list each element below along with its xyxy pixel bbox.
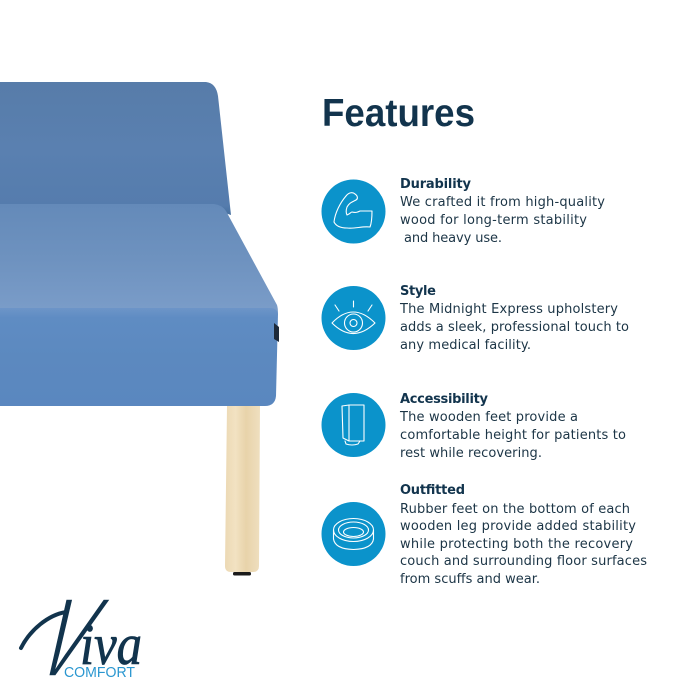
text: accessibility [399, 392, 626, 461]
text: accessibility: The wooden feet provide a [399, 410, 578, 425]
text: style: Style [400, 284, 436, 299]
text: style [399, 284, 629, 353]
icon: eye [322, 286, 386, 350]
text: style: any medical facility. [400, 338, 531, 353]
text: outfitted: Outfitted [400, 483, 465, 498]
feature: outfitted [322, 483, 647, 587]
text: outfitted: from scuffs and wear. [400, 572, 540, 587]
text: durability: We crafted it from high-quality [400, 195, 605, 210]
feature: durability [322, 177, 605, 246]
text: accessibility: rest while recovering. [400, 446, 542, 461]
title: Features [322, 92, 475, 135]
icon: flexed arm [322, 180, 386, 244]
wooden leg [225, 406, 260, 572]
couch seat front [0, 308, 278, 406]
logo wordmark: iva: iva [80, 612, 142, 677]
photo: recovery couch [0, 82, 279, 576]
logo: Viva Comfort [18, 576, 142, 700]
text: outfitted: couch and surrounding floor surfaces [400, 554, 647, 569]
logo wordmark: Comfort: COMFORT [64, 665, 135, 681]
text: accessibility: comfortable height for patients to [400, 428, 626, 443]
icon: rubber foot ring [322, 502, 386, 566]
text: outfitted: Rubber feet on the bottom of each [400, 502, 630, 517]
icon: wooden foot [322, 393, 386, 457]
logo wordmark: Viva: V [18, 576, 121, 700]
text: durability: Durability [400, 177, 472, 192]
text: durability [400, 177, 605, 246]
couch seat cushion [0, 204, 278, 314]
text: durability: wood for long-term stability [400, 213, 587, 228]
text: outfitted: while protecting both the recovery [400, 537, 633, 552]
feature: accessibility [322, 392, 626, 461]
text: durability: and heavy use. [404, 231, 502, 246]
text: style: The Midnight Express upholstery [399, 302, 618, 317]
text: style: adds a sleek, professional touch to [400, 320, 629, 335]
rubber foot [233, 572, 251, 576]
text: outfitted: wooden leg provide added stability [400, 519, 636, 534]
text: accessibility: Accessibility [400, 392, 489, 407]
couch backrest [0, 82, 231, 215]
logo flourish [21, 612, 66, 648]
side strap [274, 323, 279, 342]
text: outfitted [400, 483, 647, 587]
feature: style [322, 284, 629, 353]
